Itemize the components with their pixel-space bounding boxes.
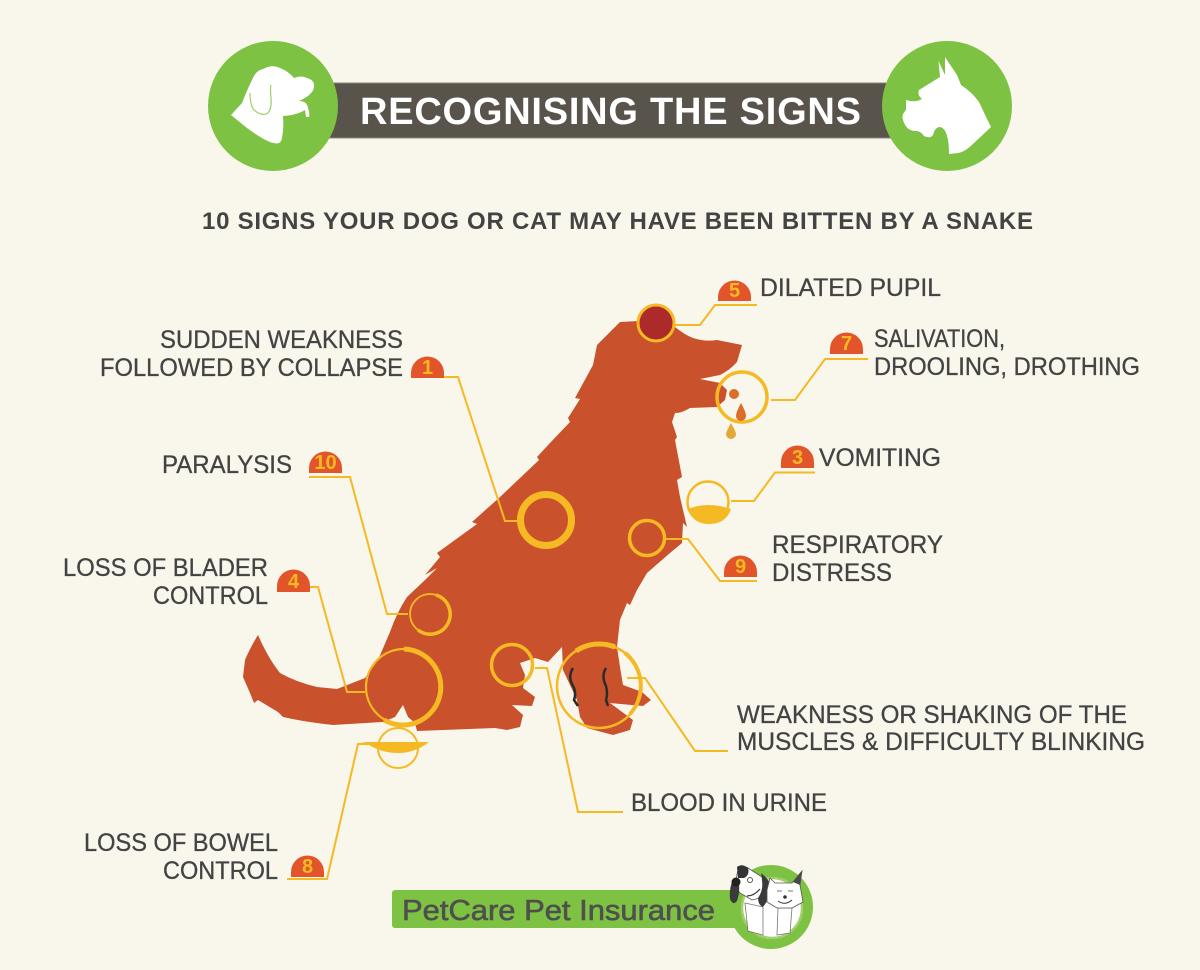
circle [630,520,664,556]
circle [688,482,728,522]
leader line [287,744,372,879]
badge: 10 [314,452,337,474]
label: RESPIRATORY [772,531,943,559]
icon: dog head [231,66,314,143]
sign 8: loss of bowel control [84,728,429,885]
label [84,829,278,885]
label: DISTRESS [772,559,892,587]
logo: PetCare Pet Insurance [392,865,813,949]
icon: bowl [688,505,731,524]
circle [520,494,572,546]
badge: 4 [288,571,300,593]
label: SUDDEN WEAKNESS [160,326,403,354]
leader line [535,668,623,812]
label [100,326,403,382]
label: BLOOD IN URINE [631,789,827,817]
label [737,701,1145,756]
leader line [411,377,520,521]
badge [309,452,342,474]
leader line [675,305,757,325]
sign 5: dilated pupil [638,274,941,341]
badge [830,332,863,355]
badge: 1 [422,357,433,379]
badge: 5 [729,280,740,302]
label: LOSS OF BOWEL [84,829,278,857]
title text: RECOGNISING THE SIGNS [360,91,861,133]
circle [717,372,767,422]
icon: foam [729,389,739,399]
label: DROOLING, DROTHING [874,353,1140,381]
right green circle [882,41,1012,171]
label: PARALYSIS [162,451,292,479]
sign: weakness or shaking of the muscles [557,644,1145,756]
badge [411,357,444,379]
badge [781,446,814,469]
circle [378,728,418,768]
badge: 7 [841,333,852,355]
icon: bowel puddle [360,742,429,753]
badge [291,856,324,878]
circle [410,594,450,634]
label: MUSCLES & DIFFICULTY BLINKING [737,728,1145,756]
label [63,554,268,610]
sign 9: respiratory distress [630,520,943,587]
icon: drop outer [726,423,736,439]
icon: cartoon cat [767,871,803,935]
badge: 3 [792,447,803,469]
label: CONTROL [163,857,278,885]
circle [366,649,442,725]
sign 7: salivation [717,325,1140,439]
badge [718,280,751,302]
icon: drop inner [736,403,746,421]
logo bar [392,890,737,928]
badge [724,556,757,578]
leader line [627,678,728,751]
logo text: PetCare Pet Insurance [402,895,715,927]
icon: cat head [902,57,991,154]
pupil circle [638,305,674,341]
logo circle [729,865,813,949]
label: SALIVATION, [874,325,1005,353]
sign 3: vomiting [688,444,941,524]
subtitle: 10 SIGNS YOUR DOG OR CAT MAY HAVE BEEN BITTEN BY A SNAKE [202,208,1033,235]
leader line [309,477,408,614]
sign 1: sudden weakness [100,326,572,546]
icon: cartoon dog [730,865,771,935]
label: VOMITING [819,444,941,472]
label: FOLLOWED BY COLLAPSE [100,354,403,382]
sign 4: loss of bladder control [63,554,442,725]
label [772,531,943,587]
sign 10: paralysis [162,451,450,634]
title bar [325,83,895,138]
circle [557,644,641,728]
circle [492,644,532,686]
badge: 9 [735,556,746,578]
left green circle [208,41,338,171]
label: WEAKNESS OR SHAKING OF THE [737,701,1127,729]
title banner [208,41,1012,171]
sign: blood in urine [492,644,827,817]
dog silhouette [243,321,742,735]
leader line [310,587,365,692]
icon: shaking lines [570,668,608,706]
label: LOSS OF BLADER [63,554,268,582]
leader line [665,539,757,581]
label: DILATED PUPIL [760,274,941,302]
label: CONTROL [153,582,268,610]
badge [277,570,310,593]
label [874,325,1140,381]
leader line [771,359,868,400]
leader line [731,472,815,501]
badge: 8 [302,856,313,878]
